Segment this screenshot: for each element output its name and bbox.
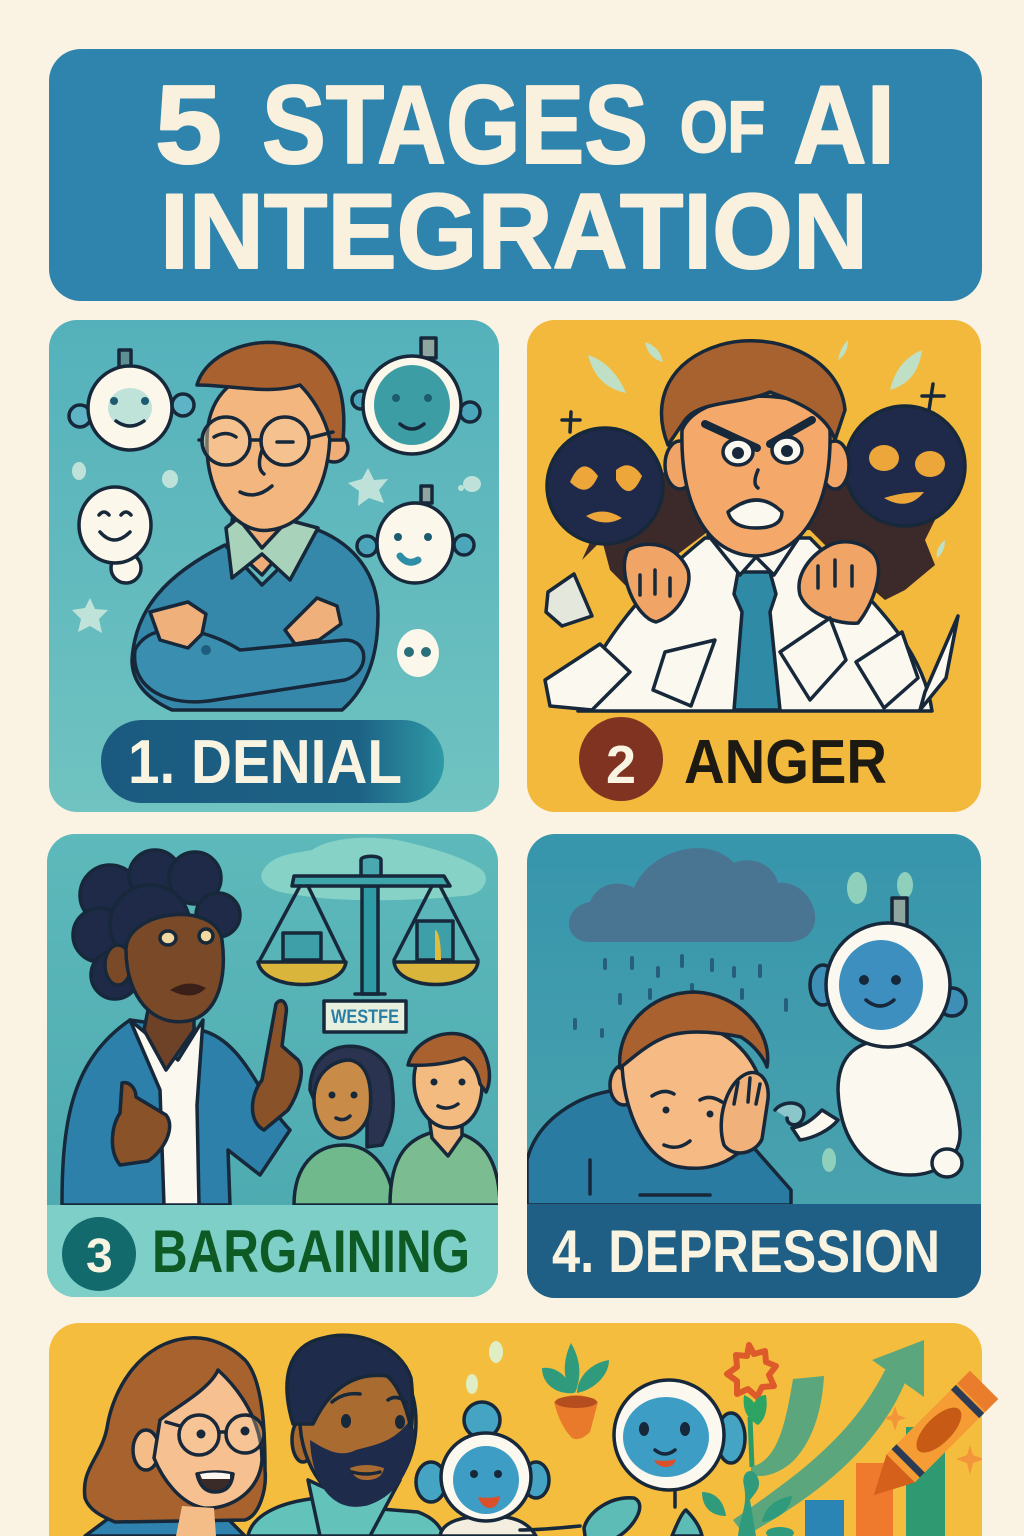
label: 4 Depression <box>527 1204 981 1298</box>
panel: 1 denial <box>49 320 499 812</box>
sparkles <box>884 1406 984 1475</box>
label: 3 Bargaining: BARGAINING <box>152 1218 470 1285</box>
panel: 5 acceptance <box>49 1323 984 1536</box>
title line one <box>155 63 895 187</box>
panel: 3 bargaining <box>47 834 500 1297</box>
robot angry left <box>547 412 663 544</box>
small ghost <box>397 629 439 677</box>
title line one: AI <box>793 63 895 187</box>
potted plant <box>542 1343 609 1439</box>
label: 4 Depression: 4. DEPRESSION <box>552 1218 940 1285</box>
bar chart <box>805 1427 945 1536</box>
scale <box>258 856 478 1032</box>
label: 2 Anger: ANGER <box>684 728 887 797</box>
sprout and curved arrow <box>744 1376 824 1476</box>
label: 2 Anger: 2 <box>606 735 636 795</box>
bearded man <box>248 1335 444 1536</box>
robot angry right <box>845 384 965 526</box>
sad robot <box>775 898 966 1177</box>
man with crossed arms <box>132 342 378 710</box>
afro hair <box>73 850 240 999</box>
woman with glasses <box>84 1338 265 1536</box>
sign <box>324 1001 406 1032</box>
title line one: 5 <box>155 63 222 187</box>
label: 1. Denial: 1. DENIAL <box>128 728 402 797</box>
droplets <box>466 1341 503 1394</box>
title line one: STAGES <box>262 63 648 187</box>
panel: 2 anger <box>527 320 981 812</box>
title line one: OF <box>680 88 765 168</box>
flower <box>727 1345 776 1397</box>
growth arrow <box>733 1340 924 1536</box>
speaker <box>62 850 301 1205</box>
children <box>294 1033 500 1205</box>
robot head left <box>79 487 151 583</box>
small robot <box>416 1402 580 1536</box>
icon: flying leaves <box>588 340 945 558</box>
robot head top right <box>352 338 480 454</box>
angry man <box>545 341 958 711</box>
title line two: INTEGRATION <box>160 171 868 291</box>
robot head top left <box>69 350 194 450</box>
scale: WESTFE <box>331 1007 399 1028</box>
background cloud <box>261 838 486 900</box>
hands <box>584 1498 702 1536</box>
storm cloud <box>569 848 815 942</box>
angry dark cloud <box>582 460 945 600</box>
big robot <box>614 1380 745 1507</box>
robot head right <box>357 486 474 583</box>
plant foliage <box>702 1471 794 1536</box>
rain <box>575 956 786 1036</box>
panel: 4 depression <box>527 834 981 1298</box>
label: 2 Anger <box>579 717 887 801</box>
sad man <box>527 992 791 1205</box>
label: 3 Bargaining <box>47 1205 498 1297</box>
label: 3 Bargaining: 3 <box>86 1230 113 1283</box>
pale drops <box>822 872 913 1172</box>
title banner <box>49 49 982 301</box>
icon: background sparkles <box>72 462 481 633</box>
icon: crayon <box>860 1371 998 1509</box>
